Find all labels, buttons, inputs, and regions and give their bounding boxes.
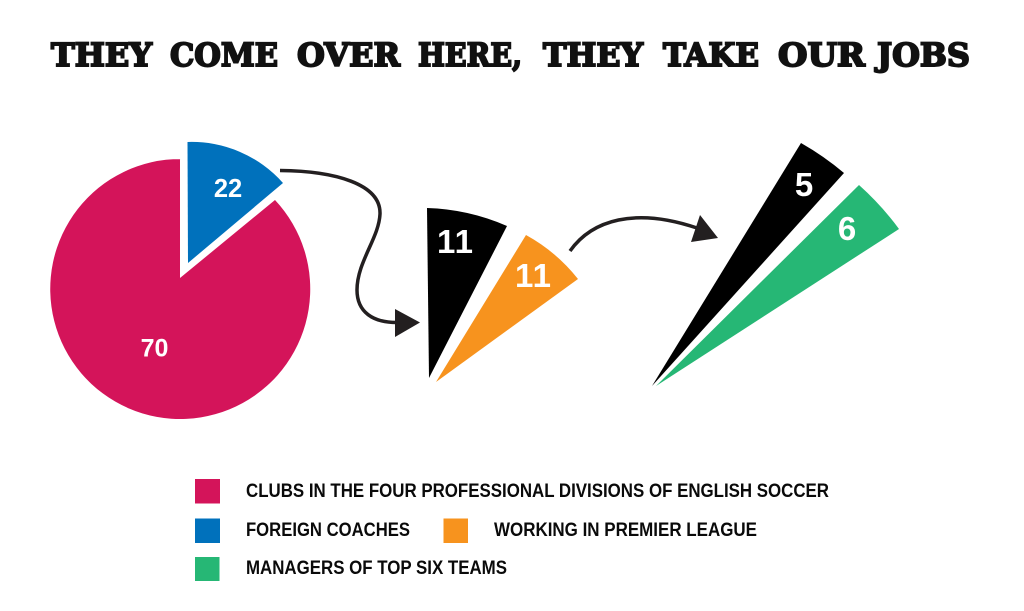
title: OVER [297,36,400,74]
value: 70: 70 [141,334,168,362]
slice: other managers 5 [652,143,844,386]
title: JOBS [874,36,970,74]
title: HERE, [418,36,522,74]
slice: foreign coaches 22 [188,142,283,263]
legend label: Premier League: WORKING IN PREMIER LEAGUE [494,519,757,541]
value: 22: 22 [214,175,242,203]
slice: managers of top six 6 [656,185,899,386]
value: 6: 6 [838,210,856,247]
legend swatch: clubs [195,479,220,504]
value: 5: 5 [795,166,813,203]
legend label: top six: MANAGERS OF TOP SIX TEAMS [246,557,507,579]
legend swatch: foreign coaches [195,518,220,543]
title: COME [170,36,278,74]
top six wedges: 5 and 6 [652,143,899,386]
legend swatch: Premier League [444,518,468,543]
legend [195,479,829,581]
title [51,36,970,74]
arrow: Premier League to top six [570,215,718,251]
legend label: clubs: CLUBS IN THE FOUR PROFESSIONAL DIVISIONS OF ENGLISH SOCCER [246,480,829,502]
legend swatch: top six [195,557,220,581]
slice: working in Premier League 11 [436,235,578,382]
title: THEY [543,36,644,74]
legend label: foreign coaches: FOREIGN COACHES [246,519,410,541]
value: orange 11: 11 [515,257,551,294]
split wedges: 11 and 11 [427,208,578,382]
title: OUR [778,36,865,74]
slice: other coaches 11 [427,208,507,378]
arrow: foreign coaches to split [280,170,420,337]
value: black 11: 11 [437,223,473,260]
pie chart: all clubs [50,142,310,419]
title: TAKE [663,36,759,74]
title: THEY [51,36,153,74]
slice: clubs 70 [50,159,310,419]
